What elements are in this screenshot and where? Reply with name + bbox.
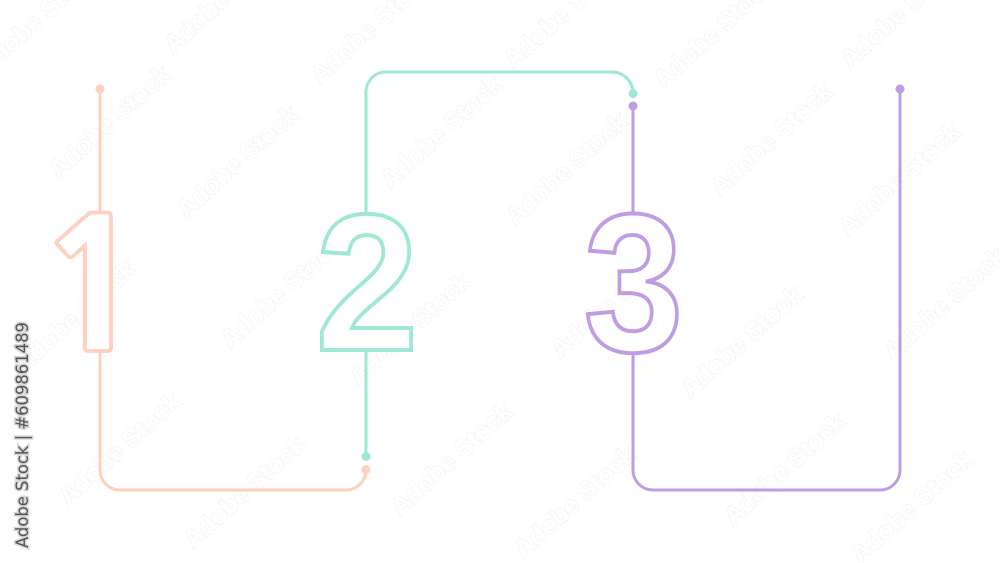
numeral 3: 3 xyxy=(584,172,683,393)
watermark pattern: Adobe Stock xyxy=(546,240,678,364)
watermark pattern: Adobe Stock xyxy=(344,267,476,391)
watermark pattern: Adobe Stock xyxy=(386,397,518,521)
watermark pattern: Adobe Stock xyxy=(501,107,633,231)
connector: peach line for step 1 xyxy=(96,84,370,490)
watermark pattern: Adobe Stock xyxy=(179,430,311,554)
watermark pattern: Adobe Stock xyxy=(706,77,838,201)
watermark pattern: Adobe Stock xyxy=(676,280,808,404)
watermark pattern: Adobe Stock xyxy=(54,387,186,511)
watermark pattern: Adobe Stock xyxy=(834,117,966,241)
watermark pattern: Adobe Stock xyxy=(172,100,304,224)
connector: teal line for step 2 xyxy=(362,72,638,461)
watermark pattern: Adobe Stock xyxy=(509,440,641,563)
connector: purple line for step 3 xyxy=(628,84,904,490)
stock id caption: Adobe Stock | #609861489 xyxy=(13,322,32,548)
watermark pattern: Adobe Stock xyxy=(376,70,508,194)
numeral 1: 1 xyxy=(36,197,152,377)
watermark pattern: Adobe Stock xyxy=(44,60,176,184)
watermark pattern: Adobe Stock xyxy=(9,255,141,379)
watermark pattern: Adobe Stock xyxy=(719,407,851,531)
watermark pattern: Adobe Stock xyxy=(216,230,348,354)
numeral 2: 2 xyxy=(315,175,419,392)
